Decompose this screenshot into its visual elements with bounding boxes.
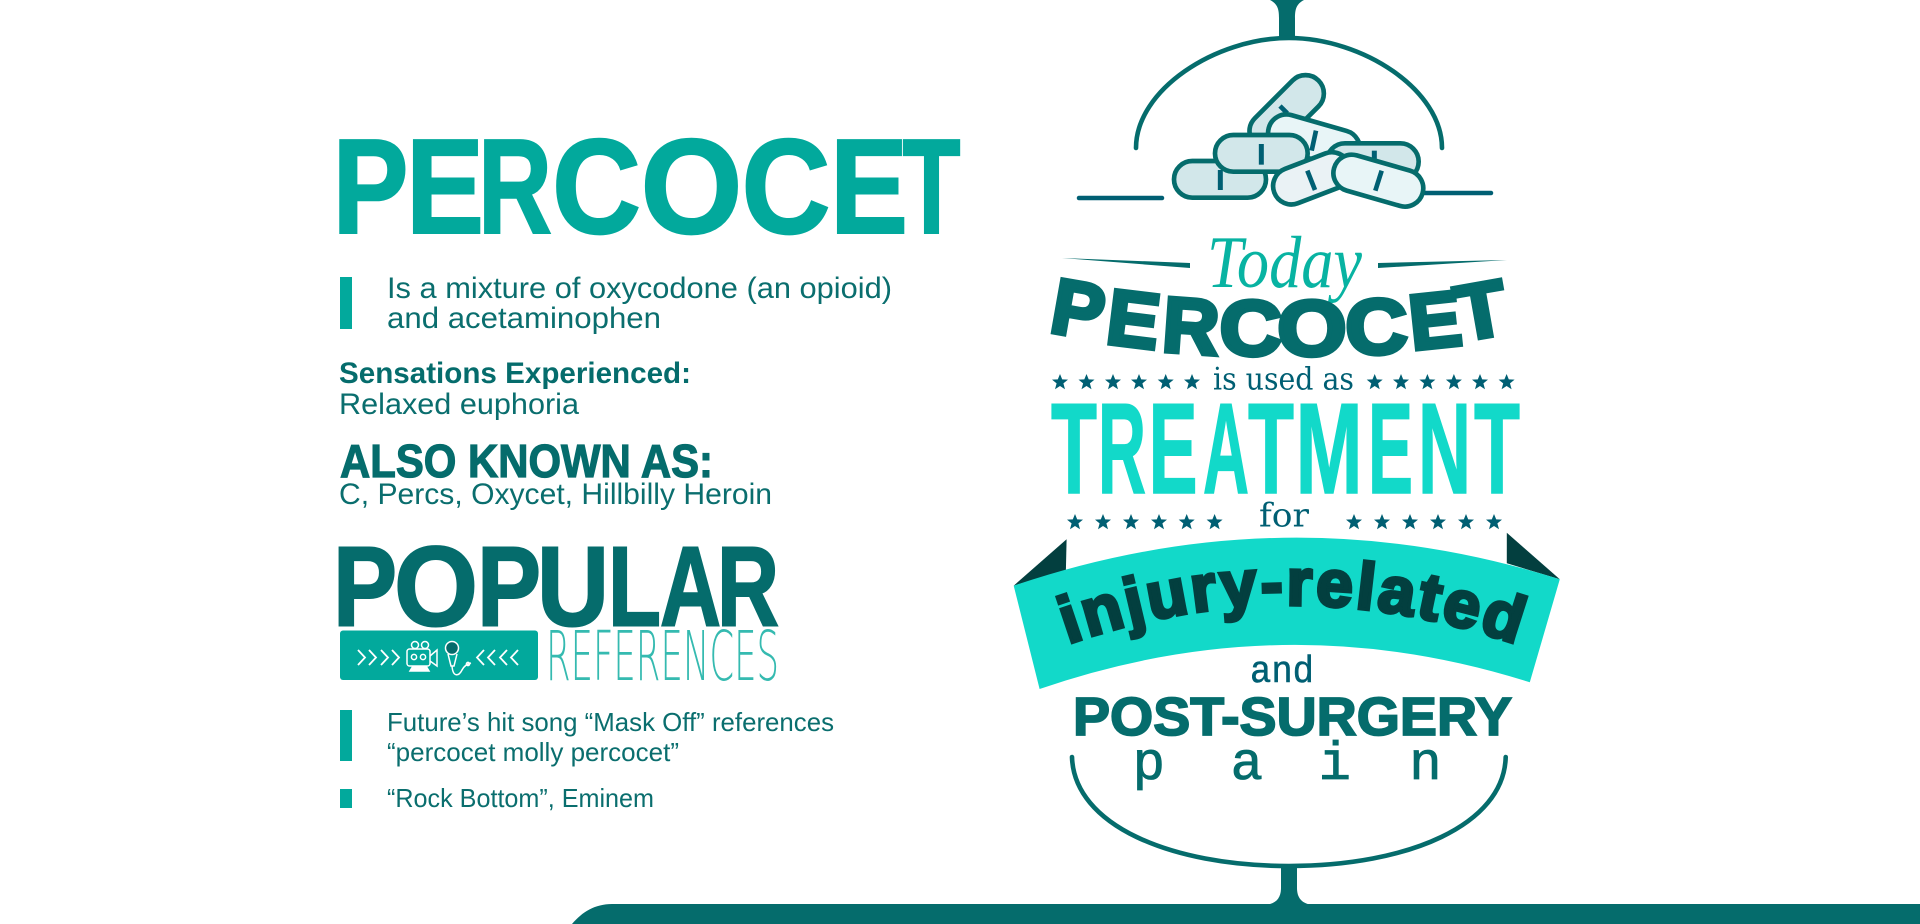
- word: TREATMENT: A: [1203, 377, 1249, 521]
- word: TREATMENT: N: [1418, 377, 1471, 521]
- stars row one: [1052, 374, 1515, 389]
- word: TREATMENT: T: [1248, 377, 1294, 521]
- arched word: PERCOCET: O: [1277, 284, 1347, 372]
- ribbon text: injury-related: [1055, 559, 1529, 645]
- heading: popular: R: [717, 524, 779, 650]
- arched word: PERCOCET: C: [1219, 285, 1282, 373]
- title: PERCOCET: C: [552, 111, 641, 262]
- ribbon banner: [1014, 532, 1560, 689]
- arched word: PERCOCET: R: [1160, 280, 1222, 372]
- word: POST-SURGERY: POST-SURGERY: [1073, 687, 1512, 747]
- text: for: for: [1259, 496, 1309, 534]
- text: pain: n: [1409, 735, 1442, 796]
- word: TREATMENT: M: [1296, 377, 1363, 521]
- arched word: PERCOCET: P: [1045, 261, 1112, 357]
- title: PERCOCET: P: [332, 111, 408, 262]
- text: pain: p: [1133, 735, 1165, 796]
- arched word: PERCOCET: T: [1449, 263, 1513, 358]
- title: PERCOCET: C: [742, 111, 830, 262]
- word: TREATMENT: T: [1474, 377, 1520, 521]
- script word: Today: Today: [1207, 222, 1362, 304]
- text: street names: C, Percs, Oxycet, Hillbilly Heroin: [339, 478, 772, 511]
- plate bowl: [1072, 757, 1506, 866]
- heading: popular: L: [608, 524, 661, 650]
- text: pain: i: [1319, 735, 1351, 796]
- heading: popular: A: [660, 524, 721, 650]
- title: PERCOCET: E: [830, 111, 908, 262]
- text: rock bottom: “Rock Bottom”, Eminem: [387, 783, 654, 813]
- text: pain: a: [1231, 735, 1263, 796]
- word: TREATMENT: T: [1051, 377, 1097, 521]
- title: PERCOCET: R: [478, 111, 552, 262]
- word: TREATMENT: R: [1098, 377, 1146, 521]
- stars row two: [1067, 514, 1502, 529]
- word: TREATMENT: E: [1149, 377, 1198, 521]
- arched word: PERCOCET: [1045, 261, 1513, 373]
- heading: also known as: ALSO KNOWN AS:: [340, 435, 713, 487]
- cloche handle: [1270, 0, 1304, 38]
- arched word: PERCOCET: E: [1405, 274, 1466, 367]
- bullet bar: future: [340, 710, 352, 761]
- arched word: PERCOCET: C: [1344, 283, 1409, 372]
- bullet bar: rock bottom: [340, 789, 352, 808]
- left table line: [1079, 196, 1162, 200]
- icon: pile of pills: [1174, 68, 1428, 211]
- heading: popular: O: [394, 524, 478, 650]
- left swash: [1062, 258, 1190, 268]
- heading: popular: P: [333, 524, 397, 650]
- text: description: Is a mixture of oxycodone (an opioid): [387, 272, 892, 305]
- table band: [572, 904, 1920, 924]
- text: is used as: is used as: [1213, 362, 1354, 398]
- text: description: and acetaminophen: [387, 302, 661, 335]
- cloche dome: [1136, 38, 1442, 148]
- icon: right chevrons: [358, 650, 399, 665]
- icon: microphone: [446, 642, 471, 675]
- icon: video camera: [407, 642, 437, 671]
- heading: popular: U: [537, 524, 609, 650]
- text: future mask off: Future’s hit song “Mask Off” references: [387, 707, 834, 737]
- title: PERCOCET: E: [406, 111, 484, 262]
- right table line: [1425, 191, 1491, 195]
- text: relaxed euphoria: Relaxed euphoria: [339, 388, 579, 421]
- text: pain: [1133, 735, 1442, 796]
- text: and: and: [1250, 651, 1314, 694]
- bullet bar: description: [340, 277, 352, 329]
- icon: left chevrons: [477, 650, 518, 665]
- heading: sensations experienced: Sensations Experienced:: [339, 357, 691, 390]
- title: PERCOCET: T: [902, 111, 960, 262]
- title: PERCOCET: O: [640, 111, 742, 262]
- panel: cloche illustration: [572, 0, 1920, 924]
- text: future mask off: “percocet molly percocet”: [387, 737, 679, 767]
- word: TREATMENT: E: [1368, 377, 1413, 521]
- heading: references: REFERENCES: [546, 617, 779, 697]
- arched word: PERCOCET: E: [1102, 272, 1165, 366]
- banner: media icons: [340, 630, 538, 680]
- heading: popular: P: [477, 524, 541, 650]
- panel: left text column: [332, 111, 960, 813]
- plate stem: [1262, 866, 1316, 905]
- right swash: [1378, 260, 1507, 268]
